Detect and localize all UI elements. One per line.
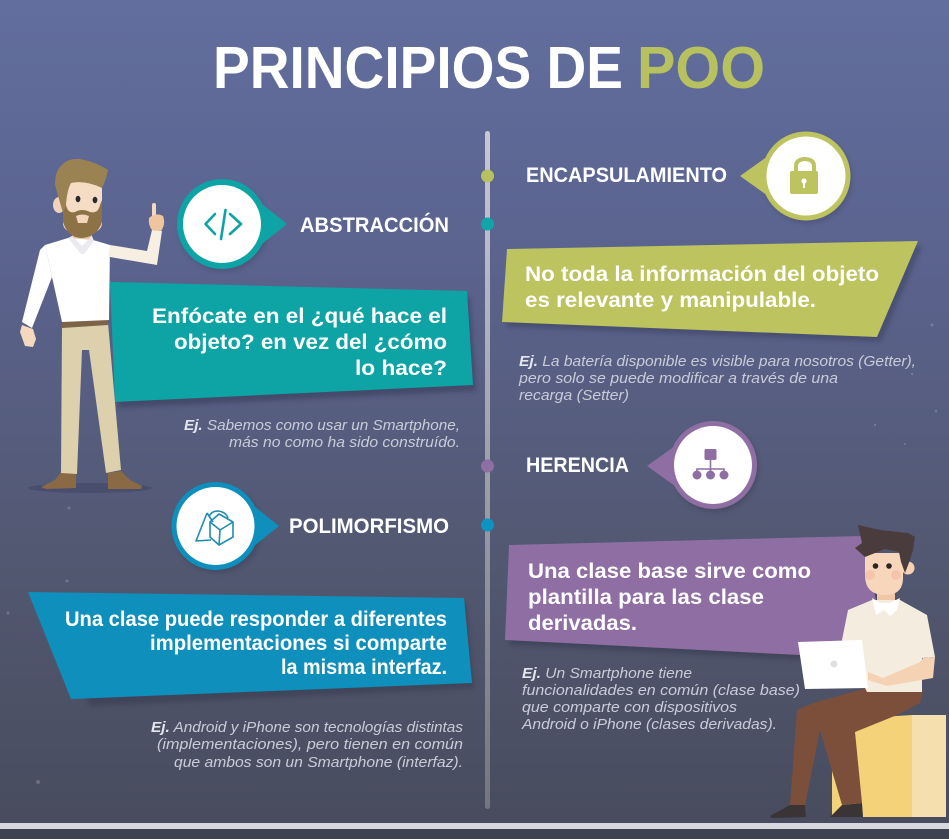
encapsulamiento banner text: es relevante y manipulable.	[525, 288, 816, 312]
encapsulamiento example	[518, 354, 916, 404]
encapsulamiento banner text	[525, 262, 879, 312]
polimorfismo example	[151, 720, 463, 771]
polimorfismo example: (implementaciones), pero tienen en común	[157, 737, 463, 753]
abstraccion heading: ABSTRACCIÓN	[300, 213, 449, 237]
icon: padlock	[740, 132, 852, 224]
herencia banner	[505, 536, 880, 660]
abstraccion banner text: Enfócate en el ¿qué hace el	[152, 304, 447, 328]
icon: shapes	[172, 482, 279, 573]
illustration: man pointing	[20, 159, 164, 493]
panel: polimorfismo	[28, 482, 474, 771]
central timeline	[481, 131, 494, 809]
herencia banner text	[528, 559, 811, 635]
polimorfismo heading: POLIMORFISMO	[289, 515, 449, 538]
abstraccion banner	[110, 282, 476, 408]
encapsulamiento banner text: No toda la información del objeto	[525, 262, 879, 286]
title: POO	[637, 35, 765, 101]
encapsulamiento example: pero solo se puede modificar a través de una	[518, 371, 838, 387]
herencia example	[521, 666, 800, 733]
herencia example: Ej. Un Smartphone tiene	[522, 666, 692, 682]
abstraccion example: Ej. Sabemos como usar un Smartphone,	[184, 418, 460, 434]
abstraccion banner text: lo hace?	[355, 356, 447, 380]
herencia banner text: Una clase base sirve como	[528, 559, 811, 583]
abstraccion banner text	[152, 304, 447, 380]
encapsulamiento example: Ej. La batería disponible es visible para nosotros (Getter),	[519, 354, 916, 370]
herencia banner text: plantilla para las clase	[528, 585, 764, 609]
herencia example: Android o iPhone (clases derivadas).	[521, 717, 777, 733]
polimorfismo banner text	[65, 607, 447, 679]
polimorfismo example: Ej. Android y iPhone son tecnologías distintas	[151, 720, 463, 736]
encapsulamiento example: recarga (Setter)	[519, 388, 629, 404]
encapsulamiento heading: ENCAPSULAMIENTO	[526, 164, 727, 187]
polimorfismo banner text: implementaciones si comparte	[150, 631, 447, 655]
icon: code brackets	[177, 179, 287, 272]
polimorfismo banner text: la misma interfaz.	[281, 655, 447, 679]
herencia heading: HERENCIA	[526, 454, 629, 477]
herencia example: que comparte con dispositivos	[522, 700, 737, 716]
abstraccion banner text: objeto? en vez del ¿cómo	[174, 330, 447, 354]
panel: herencia	[505, 421, 880, 733]
polimorfismo banner	[28, 592, 474, 706]
polimorfismo banner text: Una clase puede responder a diferentes	[65, 607, 447, 631]
icon: hierarchy	[647, 421, 759, 512]
title: PRINCIPIOS DE	[213, 35, 623, 101]
panel: abstraccion	[110, 179, 476, 451]
panel: encapsulamiento	[502, 132, 922, 404]
herencia example: funcionalidades en común (clase base)	[522, 683, 800, 699]
illustration: man with laptop on box	[770, 525, 946, 818]
polimorfismo example: que ambos son un Smartphone (interfaz).	[174, 755, 463, 771]
herencia banner text: derivadas.	[528, 611, 637, 635]
abstraccion example	[184, 418, 460, 451]
encapsulamiento banner	[502, 241, 922, 342]
abstraccion example: más no como ha sido construído.	[229, 435, 460, 451]
